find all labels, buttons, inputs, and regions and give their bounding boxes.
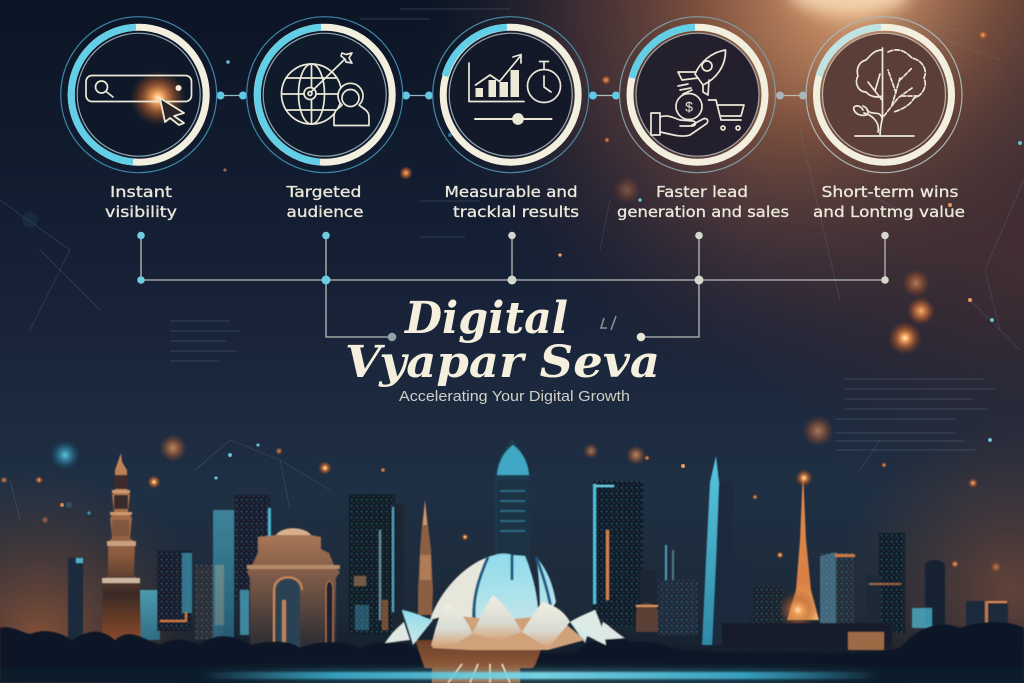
circle 1: instant visibility [61, 17, 217, 173]
connector dots between circles [216, 92, 807, 100]
label: targeted audience: Targeted [285, 183, 362, 201]
India Gate [247, 528, 340, 648]
label: targeted audience: audience [286, 203, 364, 221]
domed tower [495, 438, 530, 570]
circle 2: targeted audience [247, 17, 403, 173]
title: Digital [403, 293, 568, 344]
right buildings [593, 456, 1008, 650]
icon: growth chart, stopwatch and slider [469, 54, 560, 124]
icon: half tree half brain [854, 48, 925, 136]
icon: rocket, coin, hand and cart: $ [685, 98, 693, 114]
label: short-term wins: and Lontmg value [813, 203, 965, 221]
label: short-term wins: Short-term wins [822, 183, 959, 201]
labels [105, 183, 965, 221]
icon: search bar and cursor [86, 70, 192, 126]
decorative mark [601, 316, 616, 330]
network of stars [0, 20, 1024, 520]
title [345, 293, 660, 388]
label: measurable results: tracklal results [453, 203, 579, 221]
label: instant visibility: Instant [110, 183, 172, 201]
label: faster lead generation: Faster lead [656, 183, 748, 201]
tree line [0, 622, 1024, 683]
icon: rocket, coin, hand and cart [651, 50, 744, 136]
left buildings [68, 495, 271, 646]
circle 4: faster lead generation [620, 17, 776, 173]
glowing particles [0, 30, 1022, 573]
skyline [0, 438, 1024, 683]
Qutub Minar tower [102, 453, 141, 640]
icon: globe, dart and person [282, 53, 369, 126]
lotus temple [385, 554, 625, 683]
timeline connector tree [137, 232, 889, 341]
label: instant visibility: visibility [105, 203, 177, 221]
label: faster lead generation: generation and sales [617, 203, 789, 221]
circle 5: short-term wins [806, 17, 962, 173]
dark tower with spire [349, 494, 433, 634]
title: Vyapar Seva [345, 337, 660, 388]
subtitle: Accelerating Your Digital Growth [399, 388, 630, 405]
water with glow [0, 668, 1024, 683]
label: measurable results: Measurable and [444, 183, 578, 201]
circle 3: measurable results [433, 17, 589, 173]
faint data text panels [170, 8, 995, 451]
